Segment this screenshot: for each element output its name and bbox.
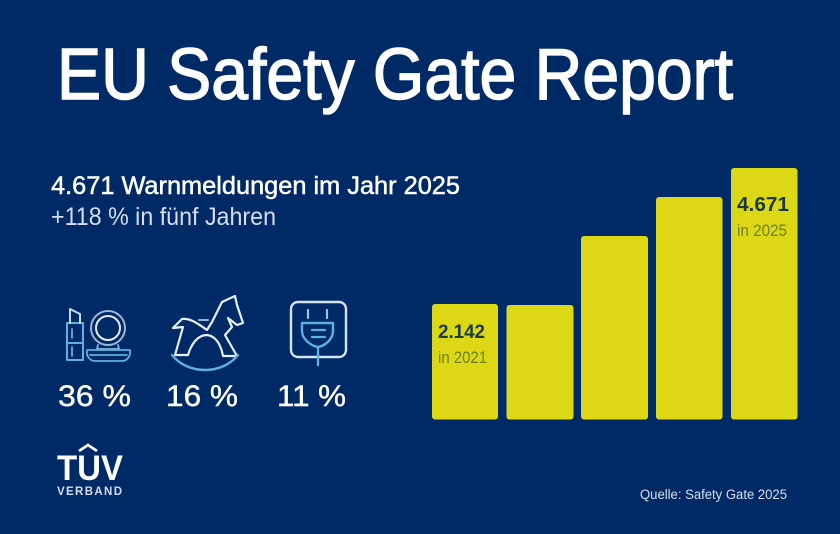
bar: 2023	[581, 236, 648, 420]
label: 2025 value: 4.671	[737, 194, 789, 216]
label: 2021 year: in 2021	[438, 348, 487, 367]
stat: electrical share: 11 %	[277, 380, 346, 413]
icon: lipstick and compact	[67, 309, 130, 361]
logo: TÜV Verband: VERBAND	[57, 486, 122, 498]
bar chart	[432, 168, 798, 420]
icon: rocking horse	[172, 296, 243, 370]
stat: cosmetics share: 36 %	[58, 380, 131, 413]
logo: TÜV Verband: TUV	[57, 449, 124, 488]
icon: plug in socket	[291, 302, 346, 365]
subheadline: growth: +118 % in fünf Jahren	[51, 203, 276, 231]
stat: toys share: 16 %	[166, 380, 238, 413]
bar: 2022	[506, 305, 574, 420]
bar: 2025	[731, 168, 798, 420]
bar: 2024	[656, 197, 722, 420]
label: 2025 year: in 2025	[737, 221, 787, 240]
headline: warning count: 4.671 Warnmeldungen im Jahr 2025	[51, 172, 460, 200]
title: EU Safety Gate Report	[57, 35, 733, 115]
bar: 2021	[432, 304, 498, 420]
label: 2021 value: 2.142	[438, 322, 485, 343]
source note: Quelle: Safety Gate 2025	[640, 487, 787, 502]
